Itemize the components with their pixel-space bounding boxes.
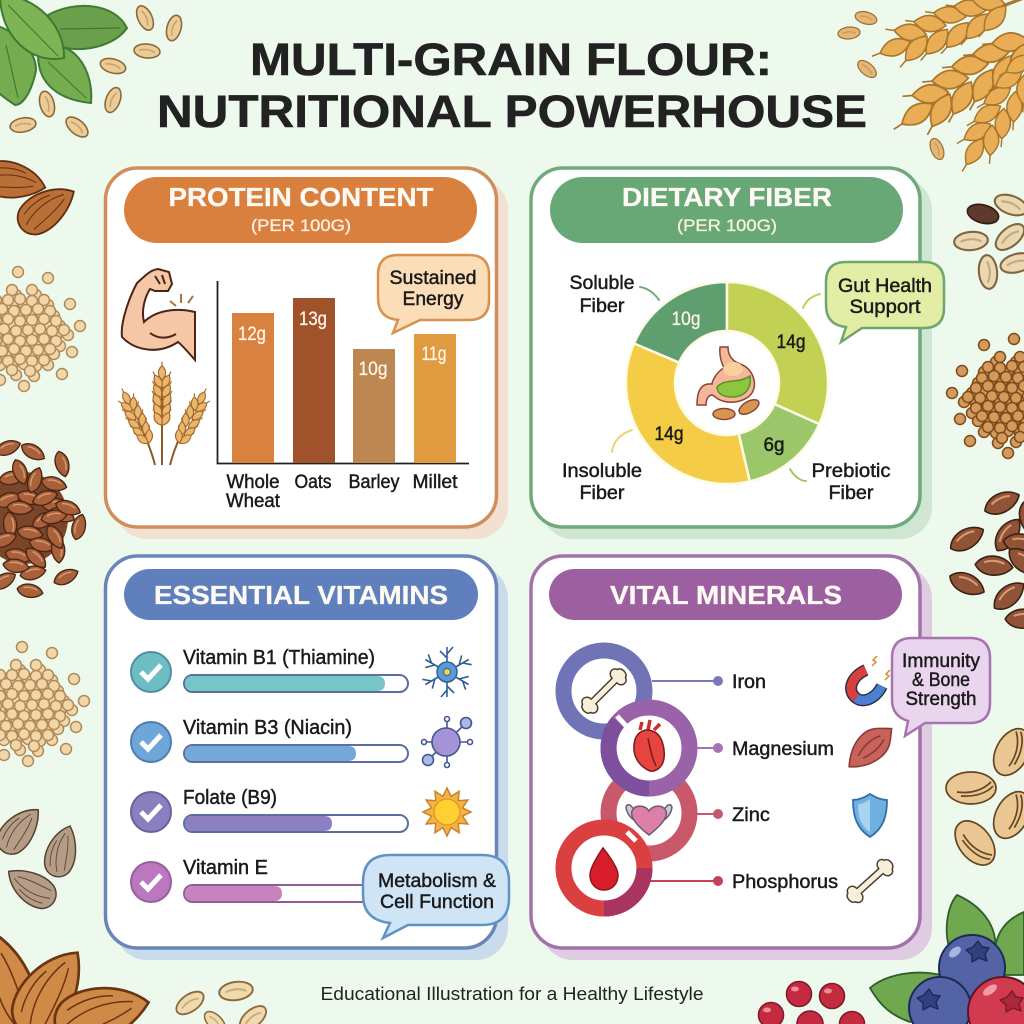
bar chart	[218, 281, 469, 512]
heading: dietary fiber: DIETARY FIBER	[622, 184, 832, 212]
callout: gut health support: Gut Health	[838, 276, 932, 297]
mineral labels: Phosphorus	[732, 872, 838, 893]
panel: protein content	[106, 168, 508, 539]
callout: immunity and bone strength	[892, 638, 990, 736]
bar: whole wheat 12g: 12g	[238, 324, 266, 345]
callout: immunity and bone strength: & Bone	[912, 670, 970, 691]
callout: sustained energy: Energy	[402, 289, 464, 310]
bar: whole wheat 12g	[232, 313, 274, 463]
callout: immunity and bone strength: Immunity	[902, 651, 980, 672]
title: MULTI-GRAIN FLOUR:	[250, 34, 772, 85]
panel: vital minerals	[531, 556, 990, 960]
icon: shield	[853, 794, 887, 837]
ring: zinc	[608, 772, 690, 854]
decoration: pale seed cluster upper left	[0, 266, 86, 392]
fiber labels: Fiber	[828, 483, 874, 504]
callout: metabolism and cell function: Cell Function	[380, 892, 494, 913]
decoration: pistachios right	[946, 722, 1024, 873]
vitamin row: b3	[131, 717, 408, 762]
heading: essential vitamins: ESSENTIAL VITAMINS	[154, 582, 448, 610]
icon: muscle	[839, 717, 901, 777]
heading: dietary fiber	[550, 177, 903, 243]
callout: metabolism and cell function: Metabolism &	[378, 871, 496, 892]
ring: phosphorus	[564, 828, 644, 908]
icon: heart with wings	[626, 805, 672, 835]
bar: oats 13g	[293, 298, 335, 463]
mineral labels: Magnesium	[732, 739, 834, 760]
heading: protein content: (PER 100G)	[251, 216, 351, 235]
bar: millet 11g	[414, 334, 456, 463]
vitamin row: b1	[131, 647, 408, 692]
fiber labels: Prebiotic	[812, 461, 890, 482]
ring: iron	[564, 650, 644, 732]
fiber labels: Fiber	[580, 483, 625, 504]
axis labels: Whole	[226, 472, 280, 493]
icon: bone	[577, 664, 631, 718]
segment: insoluble fiber 14g	[626, 344, 750, 484]
segment: prebiotic fiber 6g	[739, 404, 819, 481]
panel: essential vitamins	[106, 556, 509, 960]
icon: anatomical heart	[634, 720, 664, 771]
decoration: leaves top-left	[0, 0, 127, 105]
decoration: wheat ears top-right	[861, 0, 1024, 186]
decoration: almonds left	[0, 157, 84, 242]
vitamin row: b3: Vitamin B3 (Niacin)	[183, 717, 352, 739]
callout: immunity and bone strength: Strength	[906, 689, 976, 710]
heading: essential vitamins	[124, 569, 478, 620]
axis labels	[226, 472, 458, 512]
fiber labels: Soluble	[570, 273, 634, 294]
mineral labels	[732, 672, 838, 893]
segment: gut health 14g	[727, 282, 828, 424]
decoration: pale seed cluster lower left	[0, 642, 90, 766]
donut chart	[626, 282, 828, 484]
vitamin row: b1: Vitamin B1 (Thiamine)	[183, 647, 375, 669]
bar: oats 13g: 13g	[299, 309, 327, 330]
title: NUTRITIONAL POWERHOUSE	[157, 86, 867, 137]
callout: sustained energy	[378, 255, 489, 333]
fiber labels	[562, 273, 890, 504]
icon: stomach	[697, 347, 761, 420]
icon: sun	[423, 788, 471, 836]
connector lines	[612, 287, 820, 481]
callout: gut health support	[826, 262, 944, 342]
ring: magnesium	[608, 708, 690, 788]
callout: gut health support: Support	[850, 297, 921, 318]
icon: wheat	[110, 362, 218, 465]
leader lines	[650, 676, 723, 886]
heading: protein content	[124, 177, 477, 243]
decoration: light almonds lower left	[0, 800, 84, 915]
donut values: 6g	[764, 435, 784, 456]
axis labels: Oats	[294, 472, 332, 493]
bar: millet 11g: 11g	[422, 344, 446, 365]
icon: molecule	[422, 716, 472, 768]
mineral labels: Zinc	[732, 805, 770, 826]
axis labels: Barley	[348, 472, 400, 493]
decoration: seeds top-left	[9, 3, 184, 141]
heading: dietary fiber: (PER 100G)	[677, 216, 777, 235]
footer caption: Educational Illustration for a Healthy Lifestyle	[320, 984, 704, 1004]
vitamin row: folate: Folate (B9)	[183, 787, 277, 809]
icon: bone	[843, 855, 897, 907]
decoration: brown seeds right	[946, 486, 1024, 628]
title	[157, 34, 867, 137]
segment: soluble fiber 10g	[634, 282, 727, 363]
fiber labels: Insoluble	[562, 461, 642, 482]
decoration: amber seed cluster right	[946, 334, 1024, 458]
vitamin row: vitamin e	[131, 857, 408, 902]
decoration: flax seed cluster left	[0, 437, 89, 600]
decoration: seeds near wheat	[837, 9, 947, 161]
callout: sustained energy: Sustained	[390, 268, 476, 289]
bar: barley 10g: 10g	[358, 359, 388, 380]
icon: neuron	[422, 647, 472, 697]
decoration: bottom seeds	[172, 980, 270, 1024]
icon: flexed arm	[122, 269, 195, 360]
decoration: berries bottom-right	[758, 895, 1024, 1024]
vitamin row: folate	[131, 787, 408, 832]
vitamin row: vitamin e: Vitamin E	[183, 857, 268, 879]
panel: dietary fiber	[531, 168, 944, 539]
axis labels: Wheat	[226, 491, 281, 512]
donut values: 14g	[776, 332, 806, 353]
heading: vital minerals	[549, 569, 902, 620]
fiber labels: Fiber	[580, 296, 625, 317]
bar: barley 10g	[353, 349, 395, 463]
icon: blood drop	[590, 848, 618, 890]
heading: protein content: PROTEIN CONTENT	[168, 184, 434, 212]
donut values	[654, 309, 806, 456]
mineral labels: Iron	[732, 672, 766, 693]
icon: magnet	[851, 656, 890, 700]
axis labels: Millet	[412, 472, 458, 493]
callout: metabolism and cell function	[363, 855, 509, 938]
decoration: big almonds bottom-left	[0, 930, 155, 1024]
donut values: 14g	[654, 424, 684, 445]
heading: vital minerals: VITAL MINERALS	[610, 582, 842, 610]
donut values: 10g	[672, 309, 700, 330]
decoration: seeds right top	[953, 191, 1024, 290]
